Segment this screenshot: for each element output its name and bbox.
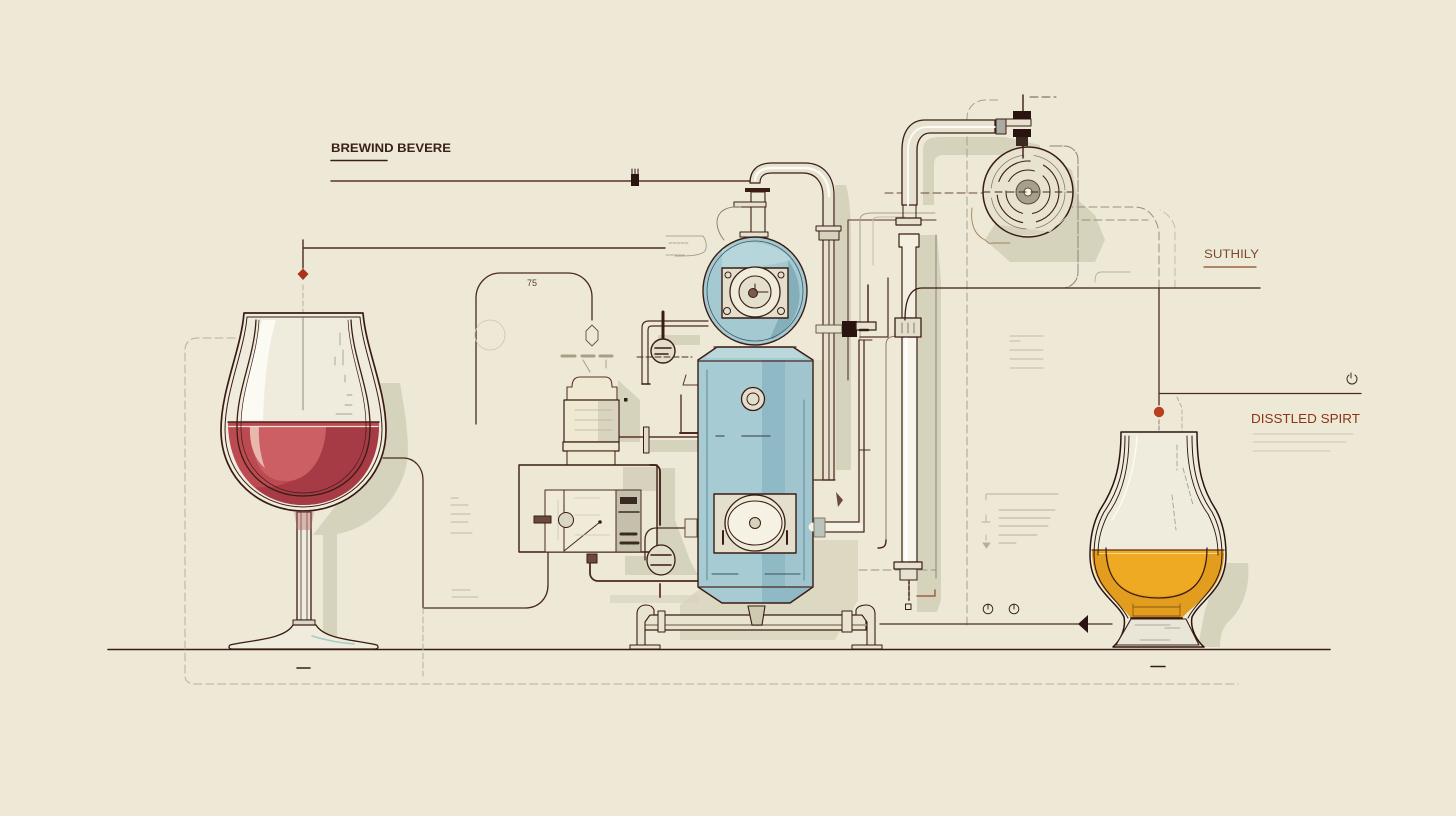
connector: arch over condenser: 75 <box>527 278 537 288</box>
connector: arch over condenser <box>475 273 598 424</box>
condenser tank <box>562 356 628 465</box>
callout: subtly label <box>1204 249 1259 267</box>
note text: faint lines by column <box>1010 336 1043 368</box>
side panel <box>616 490 641 552</box>
icon: small dial right <box>1347 373 1357 384</box>
right main pipe <box>750 163 842 480</box>
indicator <box>534 516 551 523</box>
drop shadows <box>313 137 1248 647</box>
wine highlight <box>252 426 326 481</box>
base <box>1116 619 1199 645</box>
wine surface <box>228 421 379 423</box>
meter <box>647 545 675 575</box>
note text: process list <box>982 494 1058 548</box>
connector: top line into still <box>331 169 750 186</box>
screen <box>545 490 616 552</box>
spirit <box>1092 550 1224 618</box>
ground line <box>108 648 1330 650</box>
base pipe <box>630 605 882 649</box>
glass lines <box>1090 432 1226 647</box>
small bracket note <box>1095 272 1130 282</box>
wine <box>228 422 379 505</box>
callout: subtly label: SUTHILY <box>1204 249 1259 261</box>
pot still column neck <box>717 188 770 240</box>
main tank <box>698 347 813 625</box>
connector: wine glass to control box <box>383 458 548 608</box>
gauge valve <box>637 312 692 363</box>
callout: brewed beverage heading <box>331 141 451 160</box>
inline valve <box>867 285 869 322</box>
small note tag <box>666 236 706 256</box>
wine glass <box>221 313 386 649</box>
condenser disc <box>983 147 1073 237</box>
black coupling <box>842 321 857 337</box>
callout: brewed beverage heading: BREWIND BEVERE <box>331 141 451 155</box>
measure marks <box>302 318 304 410</box>
spirit glass <box>1090 432 1226 647</box>
dash mark under wine glass <box>297 667 310 669</box>
note text: faint lines by wine glass <box>451 498 478 597</box>
long connector from column <box>905 288 1260 320</box>
icons: small dials <box>983 604 1019 614</box>
right side lines and pipes <box>813 213 936 578</box>
callout: distilled spirit label: DISSTLED SPIRT <box>1251 412 1360 426</box>
dashed drop <box>422 608 424 676</box>
connector: spirit marker line <box>1154 288 1361 432</box>
arrow into column <box>880 615 1112 633</box>
bowl <box>221 313 386 511</box>
coil trace under disc <box>972 208 1010 243</box>
return pipe <box>813 522 858 532</box>
lower hatch <box>714 494 796 553</box>
box outlet <box>587 554 597 563</box>
bottom outlet <box>748 606 765 625</box>
foot <box>229 625 378 649</box>
tank gauge <box>742 388 764 410</box>
dash mark under spirit glass <box>1151 666 1165 668</box>
sphere vessel <box>703 237 807 345</box>
stem <box>297 512 311 620</box>
distillation column <box>894 120 995 610</box>
feed pipe <box>650 465 660 525</box>
spirit surface <box>1092 549 1224 551</box>
upper hatch <box>722 268 788 318</box>
control box <box>519 465 698 597</box>
left feed pipes and valves <box>619 312 708 453</box>
frame around disc <box>1050 146 1078 288</box>
connector: wine glass marker line <box>298 240 665 312</box>
measure marks <box>1172 445 1193 530</box>
wine dark side <box>255 426 379 505</box>
disc inlet fitting <box>996 95 1031 158</box>
glass highlight <box>240 320 276 420</box>
dashed frames <box>185 97 1238 684</box>
lower valve <box>619 395 698 453</box>
glass body <box>1090 432 1226 647</box>
glass outlines <box>221 313 386 511</box>
callout: distilled spirit label <box>1251 412 1360 451</box>
